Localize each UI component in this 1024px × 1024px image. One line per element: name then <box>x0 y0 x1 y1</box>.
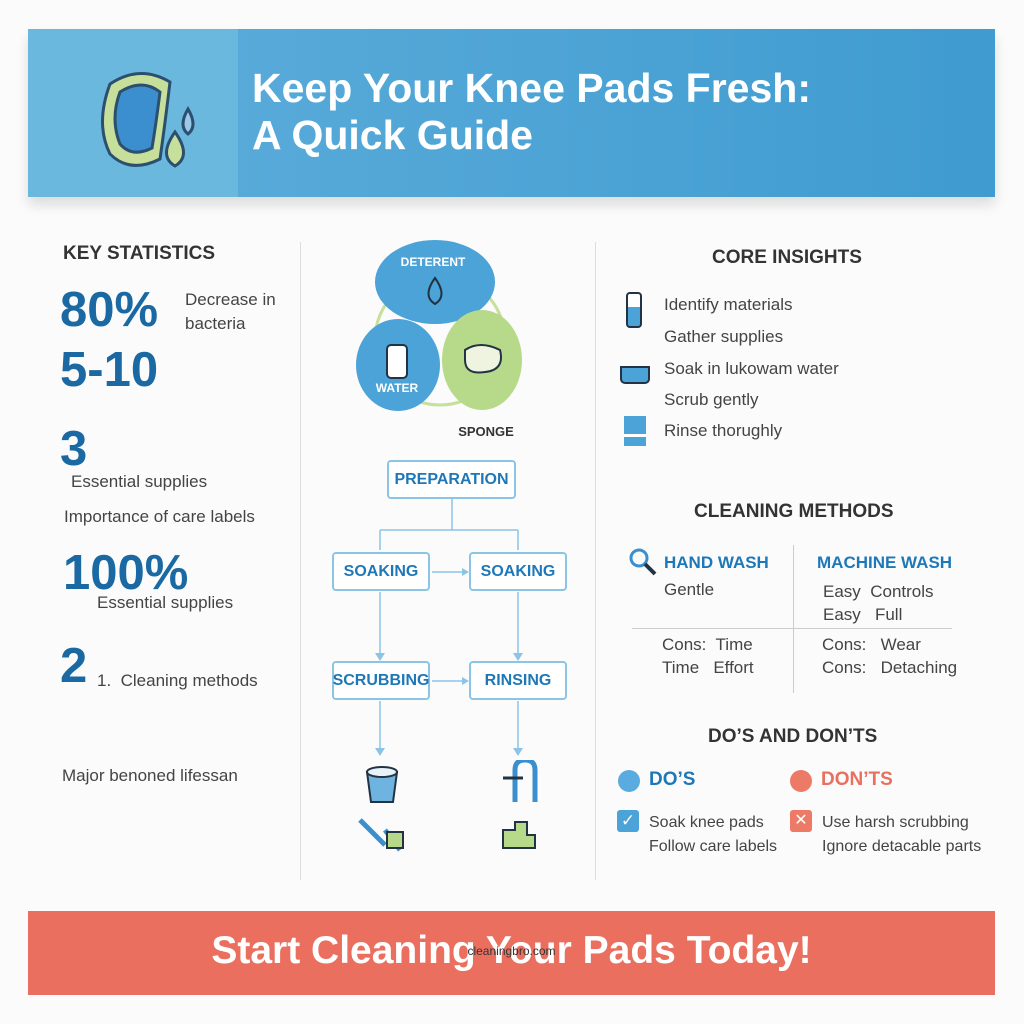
panel: key statistics: Major benoned lifessan <box>62 766 238 785</box>
panel: cleaning methods <box>630 501 957 693</box>
panel: key statistics: Essential supplies <box>71 472 207 491</box>
panel: cleaning methods: CLEANING METHODS <box>694 501 894 522</box>
panel: cleaning methods: Cons: Detaching <box>822 658 957 677</box>
panel: do's and don'ts <box>617 726 981 855</box>
panel: key statistics: 100% <box>63 546 188 600</box>
panel: do's and don'ts: DO’S AND DON’TS <box>708 726 877 747</box>
icon: bottle <box>626 292 642 328</box>
panel: core insights: Identify materials <box>664 295 792 314</box>
flowchart: RINSING <box>485 672 551 688</box>
panel: do's and don'ts: Ignore detacable parts <box>822 838 981 855</box>
icon: basket <box>620 366 650 384</box>
header banner <box>28 29 995 197</box>
panel: core insights <box>620 247 862 446</box>
panel: key statistics: Essential supplies <box>97 593 233 612</box>
venn diagram: supplies: DETERENT <box>401 255 466 269</box>
flowchart: SCRUBBING <box>333 672 429 688</box>
panel: key statistics: Importance of care labels <box>64 507 255 526</box>
panel: cleaning methods: Time Effort <box>662 658 754 677</box>
panel: do's and don'ts: Soak knee pads <box>649 814 764 831</box>
footer banner: Start Cleaning Your Pads Today! <box>211 929 812 972</box>
icon: cross: ✕ <box>794 812 808 829</box>
panel: cleaning methods: Gentle <box>664 580 714 599</box>
icon: knee pad <box>101 72 194 168</box>
title <box>252 65 811 158</box>
footer banner <box>28 911 995 995</box>
panel: key statistics: KEY STATISTICS <box>63 243 215 264</box>
panel: key statistics: 5-10 <box>60 343 158 397</box>
icon: check: ✓ <box>621 811 635 830</box>
panel: key statistics: bacteria <box>185 314 245 333</box>
panel: do's and don'ts: Follow care labels <box>649 838 777 855</box>
panel: key statistics: 1. Cleaning methods <box>97 671 258 690</box>
panel: key statistics: 2 <box>60 639 87 693</box>
panel: cleaning methods: Easy Controls <box>823 582 934 601</box>
panel: core insights: CORE INSIGHTS <box>712 247 862 268</box>
flowchart <box>332 460 567 852</box>
venn diagram: supplies: SPONGE <box>458 424 514 439</box>
title: A Quick Guide <box>252 112 533 158</box>
footer banner: cleaningbro.com <box>467 944 556 958</box>
panel: core insights: Scrub gently <box>664 390 758 409</box>
icon: cross <box>790 810 812 832</box>
panel: do's and don'ts: Use harsh scrubbing <box>822 814 969 831</box>
icons: tools <box>358 760 538 852</box>
panel: key statistics: Decrease in <box>185 290 276 309</box>
panel: do's and don'ts: DO’S <box>649 769 695 790</box>
flowchart: SOAKING <box>481 562 555 580</box>
panel: do's and don'ts: DON’TS <box>821 769 893 790</box>
title: Keep Your Knee Pads Fresh: <box>252 65 811 111</box>
flowchart: PREPARATION <box>394 470 509 488</box>
venn diagram: supplies: WATER <box>376 381 419 395</box>
panel: cleaning methods: HAND WASH <box>664 553 769 572</box>
venn diagram: supplies <box>356 240 522 439</box>
flowchart: SOAKING <box>344 562 418 580</box>
panel: cleaning methods: Easy Full <box>823 605 902 624</box>
icon: check <box>617 810 639 832</box>
icon: sponge rinse <box>624 416 646 446</box>
panel: key statistics <box>60 243 276 785</box>
panel: cleaning methods: Cons: Time <box>662 635 753 654</box>
panel: cleaning methods: MACHINE WASH <box>817 553 952 572</box>
panel: core insights: Rinse thorughly <box>664 421 782 440</box>
panel: cleaning methods: Cons: Wear <box>822 635 921 654</box>
icon: magnifier <box>630 548 656 576</box>
panel: key statistics: 80% <box>60 283 158 337</box>
panel: core insights: Soak in lukowam water <box>664 359 839 378</box>
panel: core insights: Gather supplies <box>664 327 783 346</box>
panel: key statistics: 3 <box>60 422 87 476</box>
